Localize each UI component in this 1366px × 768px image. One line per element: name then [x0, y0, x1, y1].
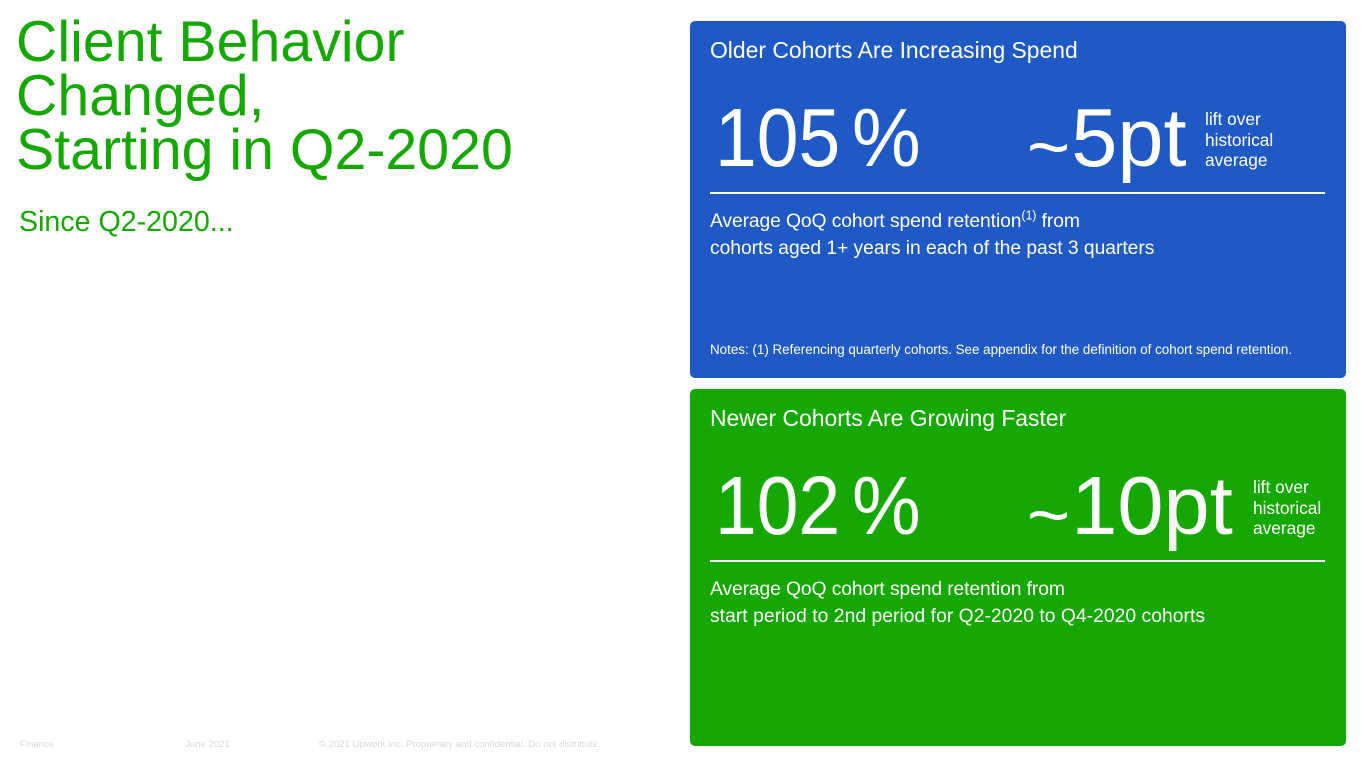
- panel: newer cohorts: [690, 389, 1346, 746]
- panel: older cohorts: [690, 21, 1346, 378]
- footnote: Notes: (1) Referencing quarterly cohorts. See appendix for the definition of cohort spend retention.: [710, 342, 1292, 356]
- stat caption: lift over historical average: [1253, 477, 1321, 538]
- description: older cohorts: Average QoQ cohort spend retention(1) from: [710, 209, 1080, 232]
- stat caption: lift over historical average: lift over: [1205, 109, 1261, 129]
- stat caption: lift over historical average: [1205, 109, 1273, 170]
- title: Client Behavior: [16, 10, 405, 74]
- stat caption: lift over historical average: historical: [1205, 130, 1273, 150]
- stat: ~5pt: ~: [1027, 105, 1070, 188]
- stat: 105%: 105: [715, 91, 840, 184]
- stat caption: lift over historical average: average: [1205, 150, 1267, 170]
- stat caption: lift over historical average: lift over: [1253, 477, 1309, 497]
- title: Starting in Q2-2020: [16, 118, 513, 182]
- stat: ~5pt: [1027, 91, 1187, 188]
- description: older cohorts: cohorts aged 1+ years in each of the past 3 quarters: [710, 238, 1154, 258]
- panel heading: older cohorts: Older Cohorts Are Increasing Spend: [710, 37, 1078, 63]
- stat caption: lift over historical average: average: [1253, 518, 1315, 538]
- description: newer cohorts: [710, 579, 1205, 626]
- footer: date: June 2021: [185, 738, 230, 750]
- stat: 102%: 102: [715, 459, 840, 552]
- stat: 105%: [715, 91, 921, 184]
- stat caption: lift over historical average: historical: [1253, 498, 1321, 518]
- stat: 105%: %: [852, 91, 921, 184]
- title: Changed,: [16, 64, 264, 128]
- stat: 102%: [715, 459, 921, 552]
- stat: ~5pt: 5pt: [1071, 91, 1187, 184]
- panel heading: newer cohorts: Newer Cohorts Are Growing Faster: [710, 405, 1066, 431]
- description: older cohorts: [710, 209, 1154, 258]
- description: newer cohorts: Average QoQ cohort spend retention from: [710, 579, 1065, 600]
- stat: ~10pt: 10pt: [1071, 459, 1233, 552]
- stat: ~10pt: ~: [1027, 473, 1070, 556]
- footer: copyright: © 2021 Upwork Inc. Proprietary and confidential. Do not distribute.: [319, 738, 601, 750]
- footer: section: Finance: [20, 738, 54, 750]
- stat: 102%: %: [852, 459, 921, 552]
- title: [16, 10, 513, 182]
- description: newer cohorts: start period to 2nd period for Q2-2020 to Q4-2020 cohorts: [710, 606, 1205, 626]
- subtitle: Since Q2-2020...: [19, 206, 234, 238]
